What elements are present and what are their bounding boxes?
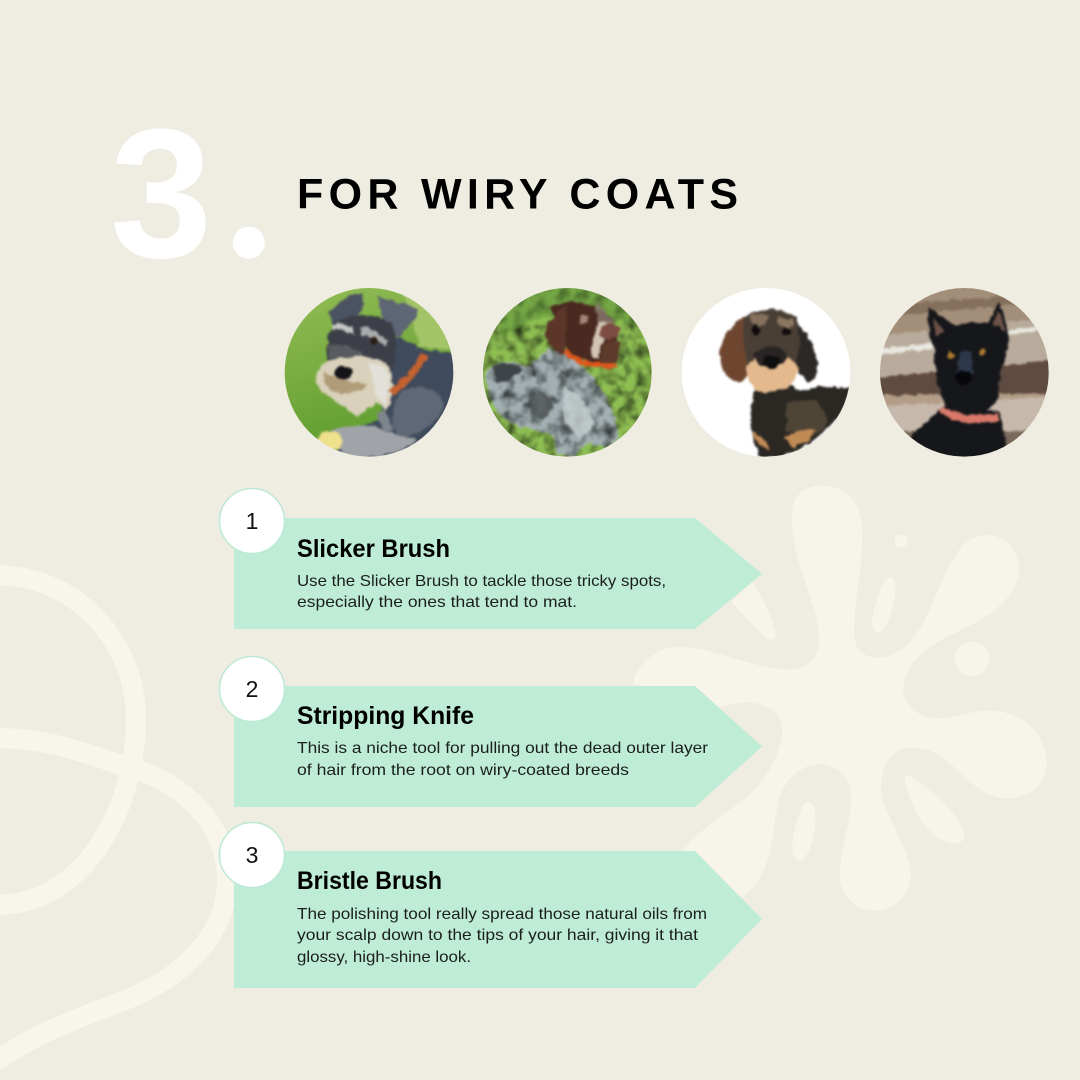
big section number: . <box>224 80 274 299</box>
photo: scottish terrier <box>880 288 1049 457</box>
body 2: This is a niche tool for pulling out the dead outer layer <box>297 740 709 757</box>
photo: wire-haired dachshund <box>682 288 850 457</box>
heading 3: Bristle Brush <box>297 867 442 895</box>
body 1 <box>297 573 666 611</box>
body 1: especially the ones that tend to mat. <box>297 594 577 611</box>
number badge 3 <box>220 822 284 888</box>
number badge 1: 1 <box>246 508 258 534</box>
big section number: 3 <box>110 90 212 296</box>
schnauzer body <box>330 337 460 462</box>
terrier body <box>908 405 1007 462</box>
body 3 <box>297 906 707 966</box>
step 1: slicker brush <box>220 488 762 629</box>
body 1: Use the Slicker Brush to tackle those tricky spots, <box>297 573 666 590</box>
arrow panel 1 <box>234 518 762 629</box>
number badge 3: 3 <box>246 842 258 868</box>
number badge 2: 2 <box>246 676 258 702</box>
title: FOR WIRY COATS <box>297 170 738 218</box>
number badge 2 <box>220 656 284 722</box>
photo: schnauzer <box>284 288 454 457</box>
arrow panel 3 <box>234 851 762 988</box>
heading 2: Stripping Knife <box>297 702 474 730</box>
pointer body <box>485 348 618 457</box>
body 2 <box>297 740 709 779</box>
step 3: bristle brush <box>220 822 762 988</box>
body 3: The polishing tool really spread those natural oils from <box>297 906 707 923</box>
photo: pointer in grass <box>483 288 652 457</box>
decorative curved lines <box>0 575 227 1062</box>
number badge 1 <box>220 488 284 554</box>
arrow panel 2 <box>234 686 762 807</box>
heading 1: Slicker Brush <box>297 535 450 563</box>
body 2: of hair from the root on wiry-coated breeds <box>297 762 629 779</box>
decorative splat <box>633 486 1047 911</box>
step 2: stripping knife <box>220 656 762 807</box>
body 3: glossy, high-shine look. <box>297 949 471 966</box>
body 3: your scalp down to the tips of your hair, giving it that <box>297 927 699 944</box>
